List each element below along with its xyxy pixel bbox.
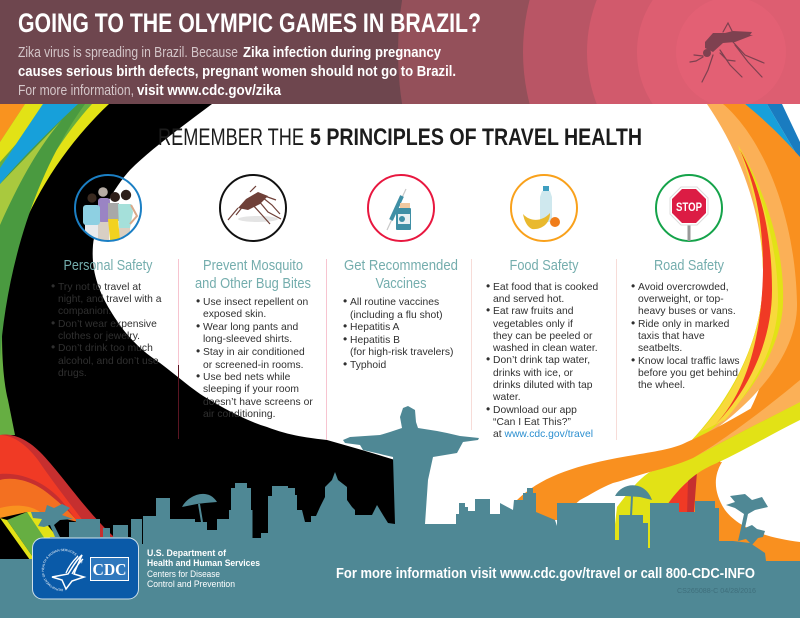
list: road safety: overweight, or top-	[638, 294, 724, 305]
list: food safety: drinks diluted with tap	[493, 380, 593, 391]
list: road safety: •	[631, 353, 635, 367]
list: road safety: taxis that have	[638, 331, 705, 342]
intro text: causes serious birth defects, pregnant women should not go to Brazil.	[18, 64, 456, 80]
icon: palm trees	[31, 494, 768, 545]
panel: road safety	[631, 175, 740, 391]
list: food safety: Eat food that is cooked	[493, 282, 598, 293]
panel: recommended vaccines	[343, 175, 458, 371]
list: prevent mosquito: doesn’t have screens or	[203, 397, 313, 408]
intro text: For more information,	[18, 83, 134, 99]
column dividers	[178, 259, 616, 440]
agency name: U.S. Department of	[147, 548, 227, 559]
list: vaccines: All routine vaccines	[350, 297, 439, 308]
icon: stop sign	[656, 175, 722, 241]
list: personal safety: •	[51, 279, 55, 293]
heading: prevent mosquito: Prevent Mosquito	[203, 257, 303, 274]
list: food safety: drinks with ice, or	[493, 368, 573, 379]
icon: food and water	[511, 175, 577, 241]
panel: food safety	[486, 175, 598, 440]
heading: vaccines: Get Recommended	[344, 257, 458, 274]
icon: header mosquito	[690, 23, 764, 82]
list: vaccines	[343, 294, 454, 371]
list: prevent mosquito: •	[196, 369, 200, 383]
heading: vaccines	[344, 257, 458, 292]
list: vaccines: Hepatitis B	[350, 335, 400, 346]
list: food safety: •	[486, 402, 490, 416]
list: personal safety: •	[51, 340, 55, 354]
agency name: Health and Human Services	[147, 558, 260, 569]
list: food safety: water.	[492, 392, 521, 403]
heading: prevent mosquito: and Other Bug Bites	[195, 275, 311, 292]
list: prevent mosquito: sleeping if your room	[203, 384, 299, 395]
heading: road safety: Road Safety	[654, 257, 724, 274]
list: vaccines: •	[343, 319, 347, 333]
list: personal safety: clothes or jewelry.	[58, 331, 140, 342]
list: road safety: Know local traffic laws	[638, 356, 740, 367]
list: road safety: before you get behind	[638, 368, 738, 379]
list: prevent mosquito: Stay in air conditioned	[203, 347, 305, 358]
bottom-left rainbow	[0, 435, 113, 562]
heading: food safety: Food Safety	[510, 257, 579, 274]
list: road safety: Avoid overcrowded,	[638, 282, 729, 293]
list: food safety: and served hot.	[493, 294, 564, 305]
list: prevent mosquito: or screened-in rooms.	[203, 360, 304, 371]
list: food safety: Download our app	[493, 405, 577, 416]
list: personal safety: drugs.	[58, 368, 87, 379]
list: prevent mosquito	[196, 294, 313, 420]
title: GOING TO THE OLYMPIC GAMES IN BRAZIL?	[18, 8, 481, 38]
list: road safety: •	[631, 316, 635, 330]
section heading: 5 PRINCIPLES OF TRAVEL HEALTH	[310, 124, 642, 151]
logo: HHS and CDC	[32, 538, 139, 600]
intro text	[18, 45, 456, 99]
icon: CDC mark: CDC	[92, 560, 126, 579]
list: personal safety: Try not to travel at	[58, 282, 141, 293]
list: food safety: •	[486, 352, 490, 366]
black swoosh background	[0, 104, 395, 562]
icon: beach umbrellas	[182, 485, 652, 522]
list: prevent mosquito: •	[196, 344, 200, 358]
list: personal safety: alcohol, and don’t use	[58, 356, 159, 367]
list: prevent mosquito: exposed skin.	[203, 309, 266, 320]
list: prevent mosquito: •	[196, 294, 200, 308]
agency name	[147, 548, 260, 590]
publication code: CS265088-C 04/28/2016	[677, 588, 756, 595]
list: road safety: seatbelts.	[638, 343, 682, 354]
icon: stop sign: STOP	[676, 200, 702, 214]
footer call to action: For more information visit www.cdc.gov/travel or call 800-CDC-INFO	[336, 566, 755, 582]
list: prevent mosquito: Use insect repellent on	[203, 297, 308, 308]
intro text: visit www.cdc.gov/zika	[137, 83, 282, 99]
header band	[0, 0, 800, 104]
list: food safety: at www.cdc.gov/travel	[493, 429, 593, 440]
list: prevent mosquito: air conditioning.	[203, 409, 275, 420]
icon: travelers	[75, 175, 141, 244]
list: road safety: the wheel.	[638, 380, 685, 391]
list: personal safety: Don’t wear expensive	[58, 319, 157, 330]
skyline with Christ the Redeemer statue	[0, 406, 800, 618]
list: vaccines: •	[343, 357, 347, 371]
list: food safety: “Can I Eat This?”	[493, 417, 572, 428]
list: food safety	[486, 279, 598, 440]
list: vaccines: Hepatitis A	[350, 322, 400, 333]
heading: vaccines: Vaccines	[376, 275, 426, 292]
list: food safety: Eat raw fruits and	[493, 306, 574, 317]
agency name: Control and Prevention	[147, 579, 235, 590]
section heading	[158, 124, 642, 151]
agency name: Centers for Disease	[147, 569, 220, 580]
left rainbow ribbons	[0, 104, 109, 435]
list: food safety: •	[486, 303, 490, 317]
list: road safety: Ride only in marked	[638, 319, 730, 330]
panel: prevent mosquito bites	[195, 175, 313, 420]
list: vaccines: •	[343, 332, 347, 346]
list: vaccines: •	[343, 294, 347, 308]
list: vaccines: (including a flu shot)	[350, 310, 443, 321]
panel: personal safety	[51, 175, 162, 379]
list: personal safety: •	[51, 316, 55, 330]
intro text: Zika infection during pregnancy	[243, 45, 441, 61]
heading: prevent mosquito	[195, 257, 311, 292]
list: vaccines: (for high-risk travelers)	[350, 347, 454, 358]
right rainbow ribbons	[690, 104, 800, 442]
list: prevent mosquito: Use bed nets while	[203, 372, 291, 383]
list: food safety: washed in clean water.	[492, 343, 598, 354]
list: vaccines: Typhoid	[350, 360, 386, 371]
list: prevent mosquito: Wear long pants and	[203, 322, 298, 333]
intro text: Zika virus is spreading in Brazil. Because	[18, 45, 238, 61]
list: personal safety: companion.	[58, 306, 111, 317]
section heading: REMEMBER THE	[158, 124, 304, 151]
list: road safety	[631, 279, 740, 391]
list: food safety: vegetables only if	[493, 319, 573, 330]
list: prevent mosquito: •	[196, 319, 200, 333]
list: road safety: heavy buses or vans.	[638, 306, 736, 317]
list: prevent mosquito: long-sleeved shirts.	[203, 334, 292, 345]
list: personal safety	[51, 279, 162, 379]
list: food safety: they can be peeled or	[493, 331, 593, 342]
lower right ribbons	[510, 380, 800, 565]
icon: mosquito	[220, 175, 286, 241]
icon: HHS eagle seal: DEPARTMENT OF HEALTH & HUMAN SERVICES • USA	[42, 548, 83, 592]
list: road safety: •	[631, 279, 635, 293]
heading: personal safety: Personal Safety	[64, 257, 153, 274]
list: food safety: •	[486, 279, 490, 293]
icon: syringe and vial	[368, 175, 434, 241]
list: personal safety: night, and travel with a	[58, 294, 162, 305]
list: food safety: Don’t drink tap water,	[493, 355, 590, 366]
list: personal safety: Don’t drink too much	[58, 343, 153, 354]
